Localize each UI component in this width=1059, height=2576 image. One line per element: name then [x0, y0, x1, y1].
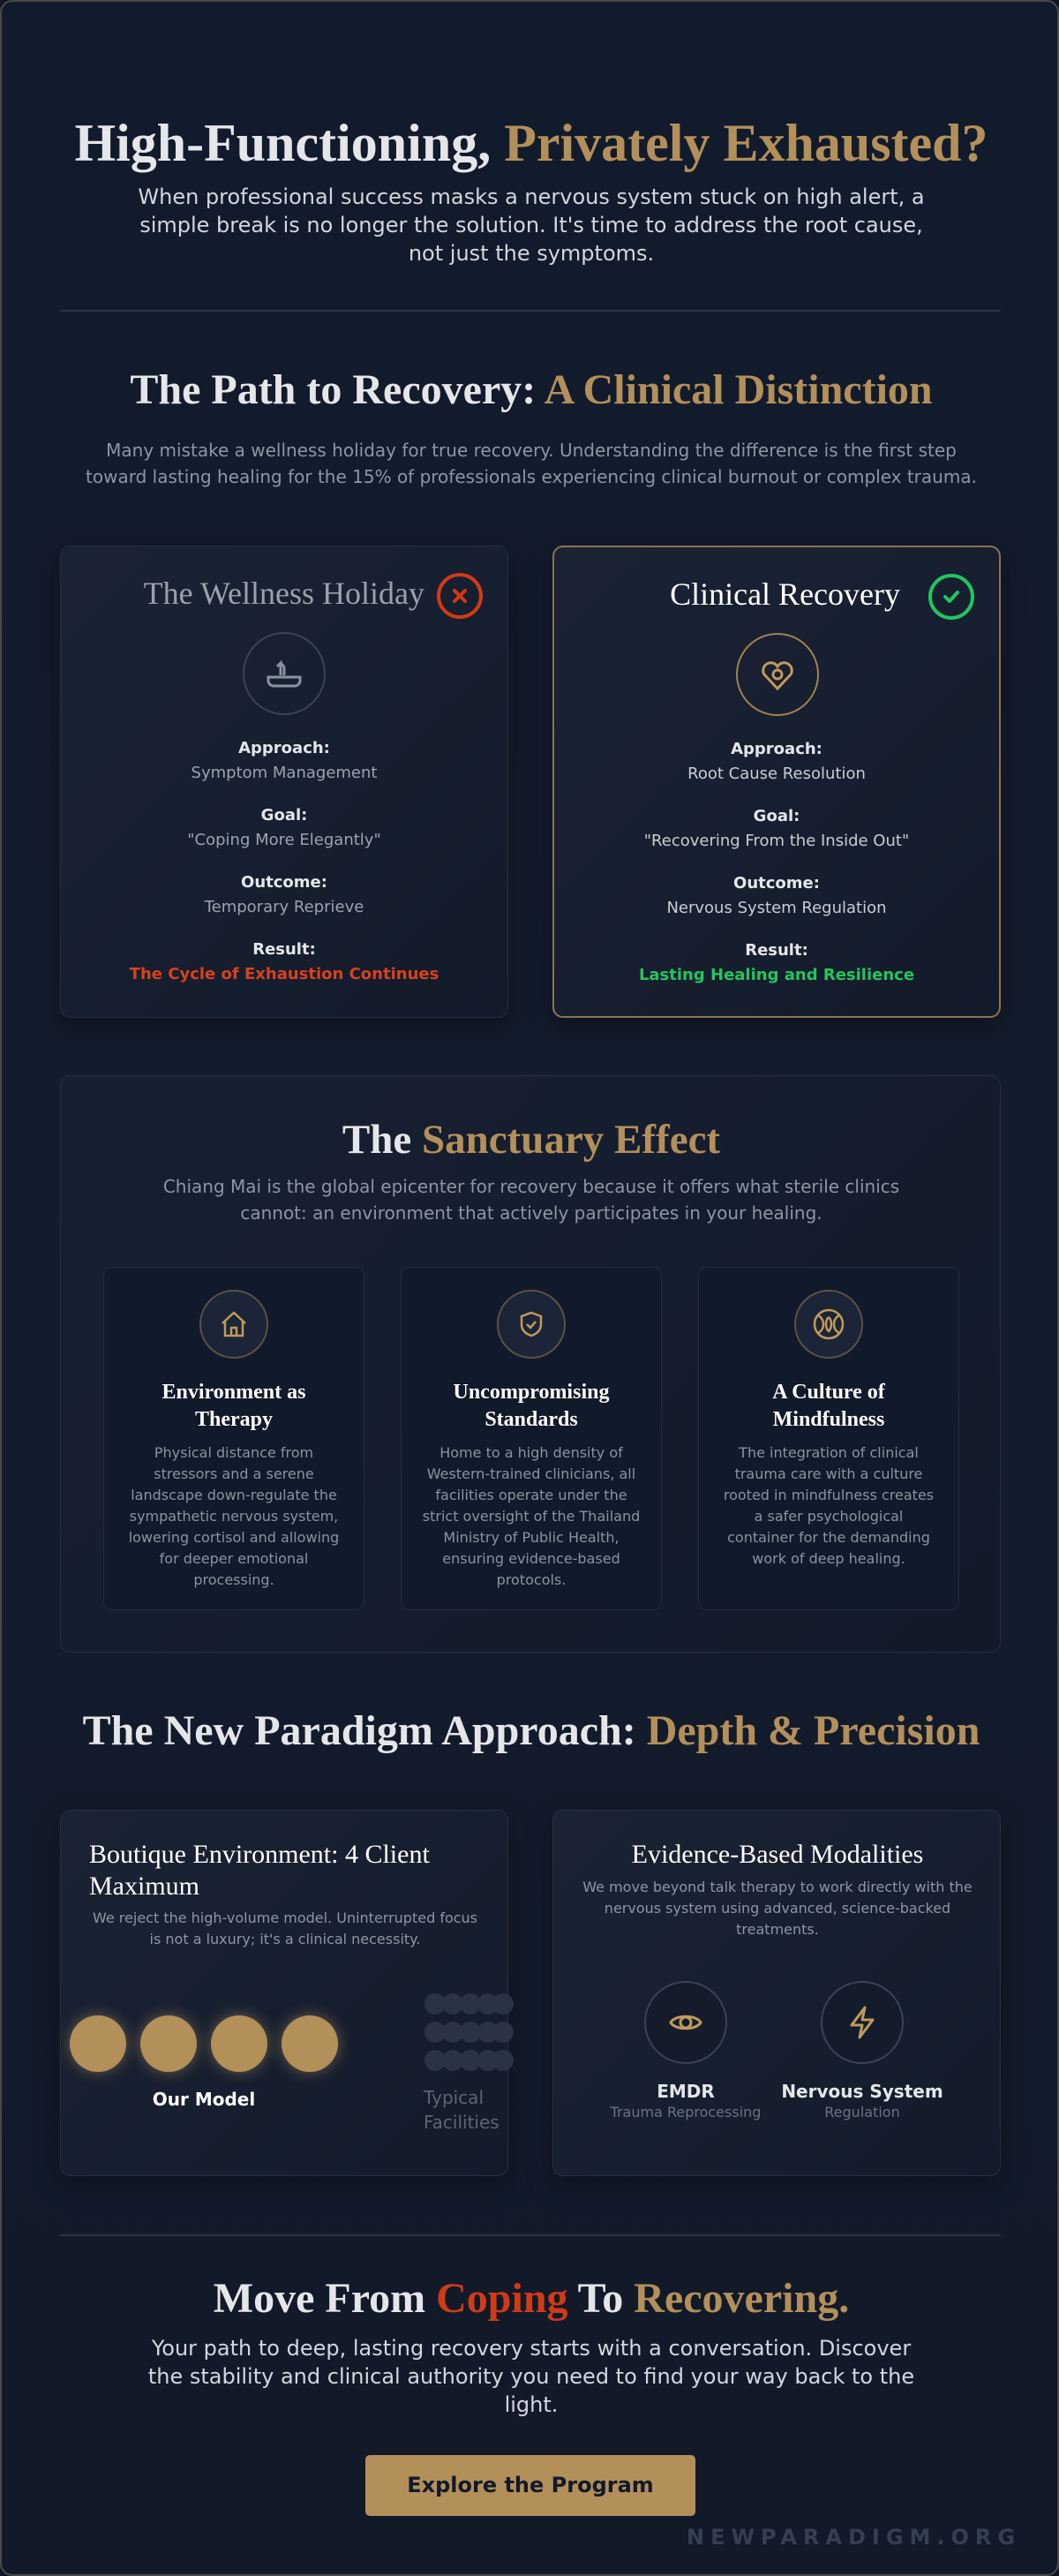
sanctuary intro: Chiang Mai is the global epicenter for recovery because it offers what sterile clinics cannot: an environment that actively participates in your healing. — [163, 1176, 899, 1224]
modality: nervous system — [781, 1981, 943, 2120]
chart: our model dots: Our Model — [153, 2089, 255, 2110]
subcard: standards — [401, 1267, 662, 1610]
intro text: When professional success masks a nervous system stuck on high alert, a simple break is no longer the solution. It's time to address the root cause, not just the symptoms. — [138, 185, 925, 266]
subcard: mindfulness: container for the demanding — [727, 1529, 930, 1546]
button: explore the program — [365, 2455, 695, 2516]
panel: wellness holiday: Temporary Reprieve — [205, 898, 364, 916]
panel: evidence-based modalities — [552, 1810, 1001, 2176]
subcard: mindfulness: trauma care with a culture — [735, 1465, 922, 1482]
modality: EMDR — [611, 1981, 761, 2120]
panel: clinical recovery — [552, 546, 1001, 1018]
icon: lotus — [794, 1290, 863, 1359]
modalities text: We move beyond talk therapy to work directly with the nervous system using advanced, science-backed treatments. — [582, 1879, 973, 1938]
card title: Clinical Recovery — [670, 576, 900, 612]
icon: x — [437, 573, 483, 619]
icon: eye — [644, 1981, 727, 2064]
subcard: standards: Standards — [484, 1408, 578, 1431]
panel: wellness holiday: The Cycle of Exhaustion Continues — [130, 965, 439, 983]
panel: clinical recovery: Approach: — [731, 740, 822, 758]
panel: clinical recovery: Root Cause Resolution — [687, 765, 866, 783]
subcard: environment: Environment as — [162, 1381, 305, 1404]
modality: EMDR: Trauma Reprocessing — [611, 2104, 761, 2120]
icon: check — [928, 574, 974, 620]
panel: boutique environment — [60, 1810, 508, 2176]
subcard: standards: Home to a high density of Western-trained clinicians, all facilities operate under the strict oversight of the Thailand Ministry of Public Health, ensuring evidence-based protocols. — [423, 1444, 640, 1588]
panel: clinical recovery: Goal: — [754, 807, 800, 825]
subcard: mindfulness: The integration of clinical — [739, 1444, 919, 1461]
path intro text: Many mistake a wellness holiday for true recovery. Understanding the difference is the first step toward lasting healing for the 15% of professionals experiencing clinical burnout or complex trauma. — [86, 440, 977, 487]
panel: clinical recovery: Outcome: — [733, 874, 820, 893]
icon: heart — [736, 633, 819, 716]
subcard: environment: Physical distance from stressors and a serene landscape down-regulate the sympathetic nervous system, lowering cortisol and allowing for deeper emotional processing. — [129, 1444, 339, 1588]
panel: clinical recovery: "Recovering From the Inside Out" — [644, 832, 909, 850]
icon: shield — [497, 1290, 566, 1359]
chart: our model dots — [62, 2007, 346, 2110]
panel: clinical recovery: Result: — [745, 941, 808, 960]
panel: clinical recovery: Lasting Healing and Resilience — [639, 966, 914, 984]
card title: The Wellness Holiday — [144, 576, 424, 611]
subcard: standards: Uncompromising — [454, 1381, 609, 1404]
boutique title: Boutique Environment: 4 Client Maximum — [89, 1840, 430, 1901]
modality: nervous system: Nervous System — [781, 2081, 943, 2102]
footer brand: NEWPARADIGM.ORG — [687, 2525, 1021, 2550]
cta heading: Move From Coping To Recovering. — [214, 2275, 849, 2322]
cta text: Your path to deep, lasting recovery starts with a conversation. Discover the stability and clinical authority you need to find your way back to the light. — [148, 2336, 914, 2417]
subcard: environment: Therapy — [195, 1408, 273, 1431]
subcard: mindfulness: Mindfulness — [773, 1408, 884, 1431]
subcard: mindfulness — [698, 1267, 959, 1610]
icon: house — [199, 1290, 268, 1359]
icon: lightning — [821, 1981, 904, 2064]
chart: typical facilities dots: Facilities — [424, 2112, 499, 2133]
boutique text: We reject the high-volume model. Uninterrupted focus is not a luxury; it's a clinical necessity. — [93, 1909, 477, 1947]
icon: bath — [243, 632, 326, 715]
panel: wellness holiday: Approach: — [238, 739, 330, 757]
modalities title: Evidence-Based Modalities — [632, 1840, 923, 1869]
subcard: mindfulness: A Culture of — [772, 1381, 885, 1404]
panel: wellness holiday: Outcome: — [241, 873, 327, 892]
chart: typical facilities dots — [424, 1993, 514, 2133]
modality: nervous system: Regulation — [824, 2104, 900, 2120]
heading: new paradigm: The New Paradigm Approach: Depth & Precision — [83, 1707, 980, 1754]
subcard: mindfulness: work of deep healing. — [752, 1550, 905, 1567]
subcard: environment — [103, 1267, 364, 1610]
panel: wellness holiday: Result: — [252, 940, 316, 959]
panel: wellness holiday: Symptom Management — [192, 764, 377, 782]
panel: wellness holiday — [60, 546, 508, 1018]
modality: EMDR: EMDR — [657, 2081, 715, 2102]
panel: wellness holiday: Goal: — [261, 806, 307, 825]
panel: wellness holiday: "Coping More Elegantly" — [187, 831, 381, 849]
subcard: mindfulness: a safer psychological — [755, 1508, 903, 1525]
panel: clinical recovery: Nervous System Regulation — [666, 899, 887, 917]
title: High-Functioning, Privately Exhausted? — [74, 114, 988, 172]
heading: The Sanctuary Effect — [342, 1117, 720, 1163]
button: explore the program: Explore the Program — [407, 2473, 654, 2497]
chart: typical facilities dots: Typical — [424, 2087, 484, 2108]
heading: path to recovery: The Path to Recovery: A Clinical Distinction — [130, 366, 933, 413]
panel: sanctuary effect — [60, 1075, 1001, 1653]
subcard: mindfulness: rooted in mindfulness creates — [724, 1487, 934, 1503]
